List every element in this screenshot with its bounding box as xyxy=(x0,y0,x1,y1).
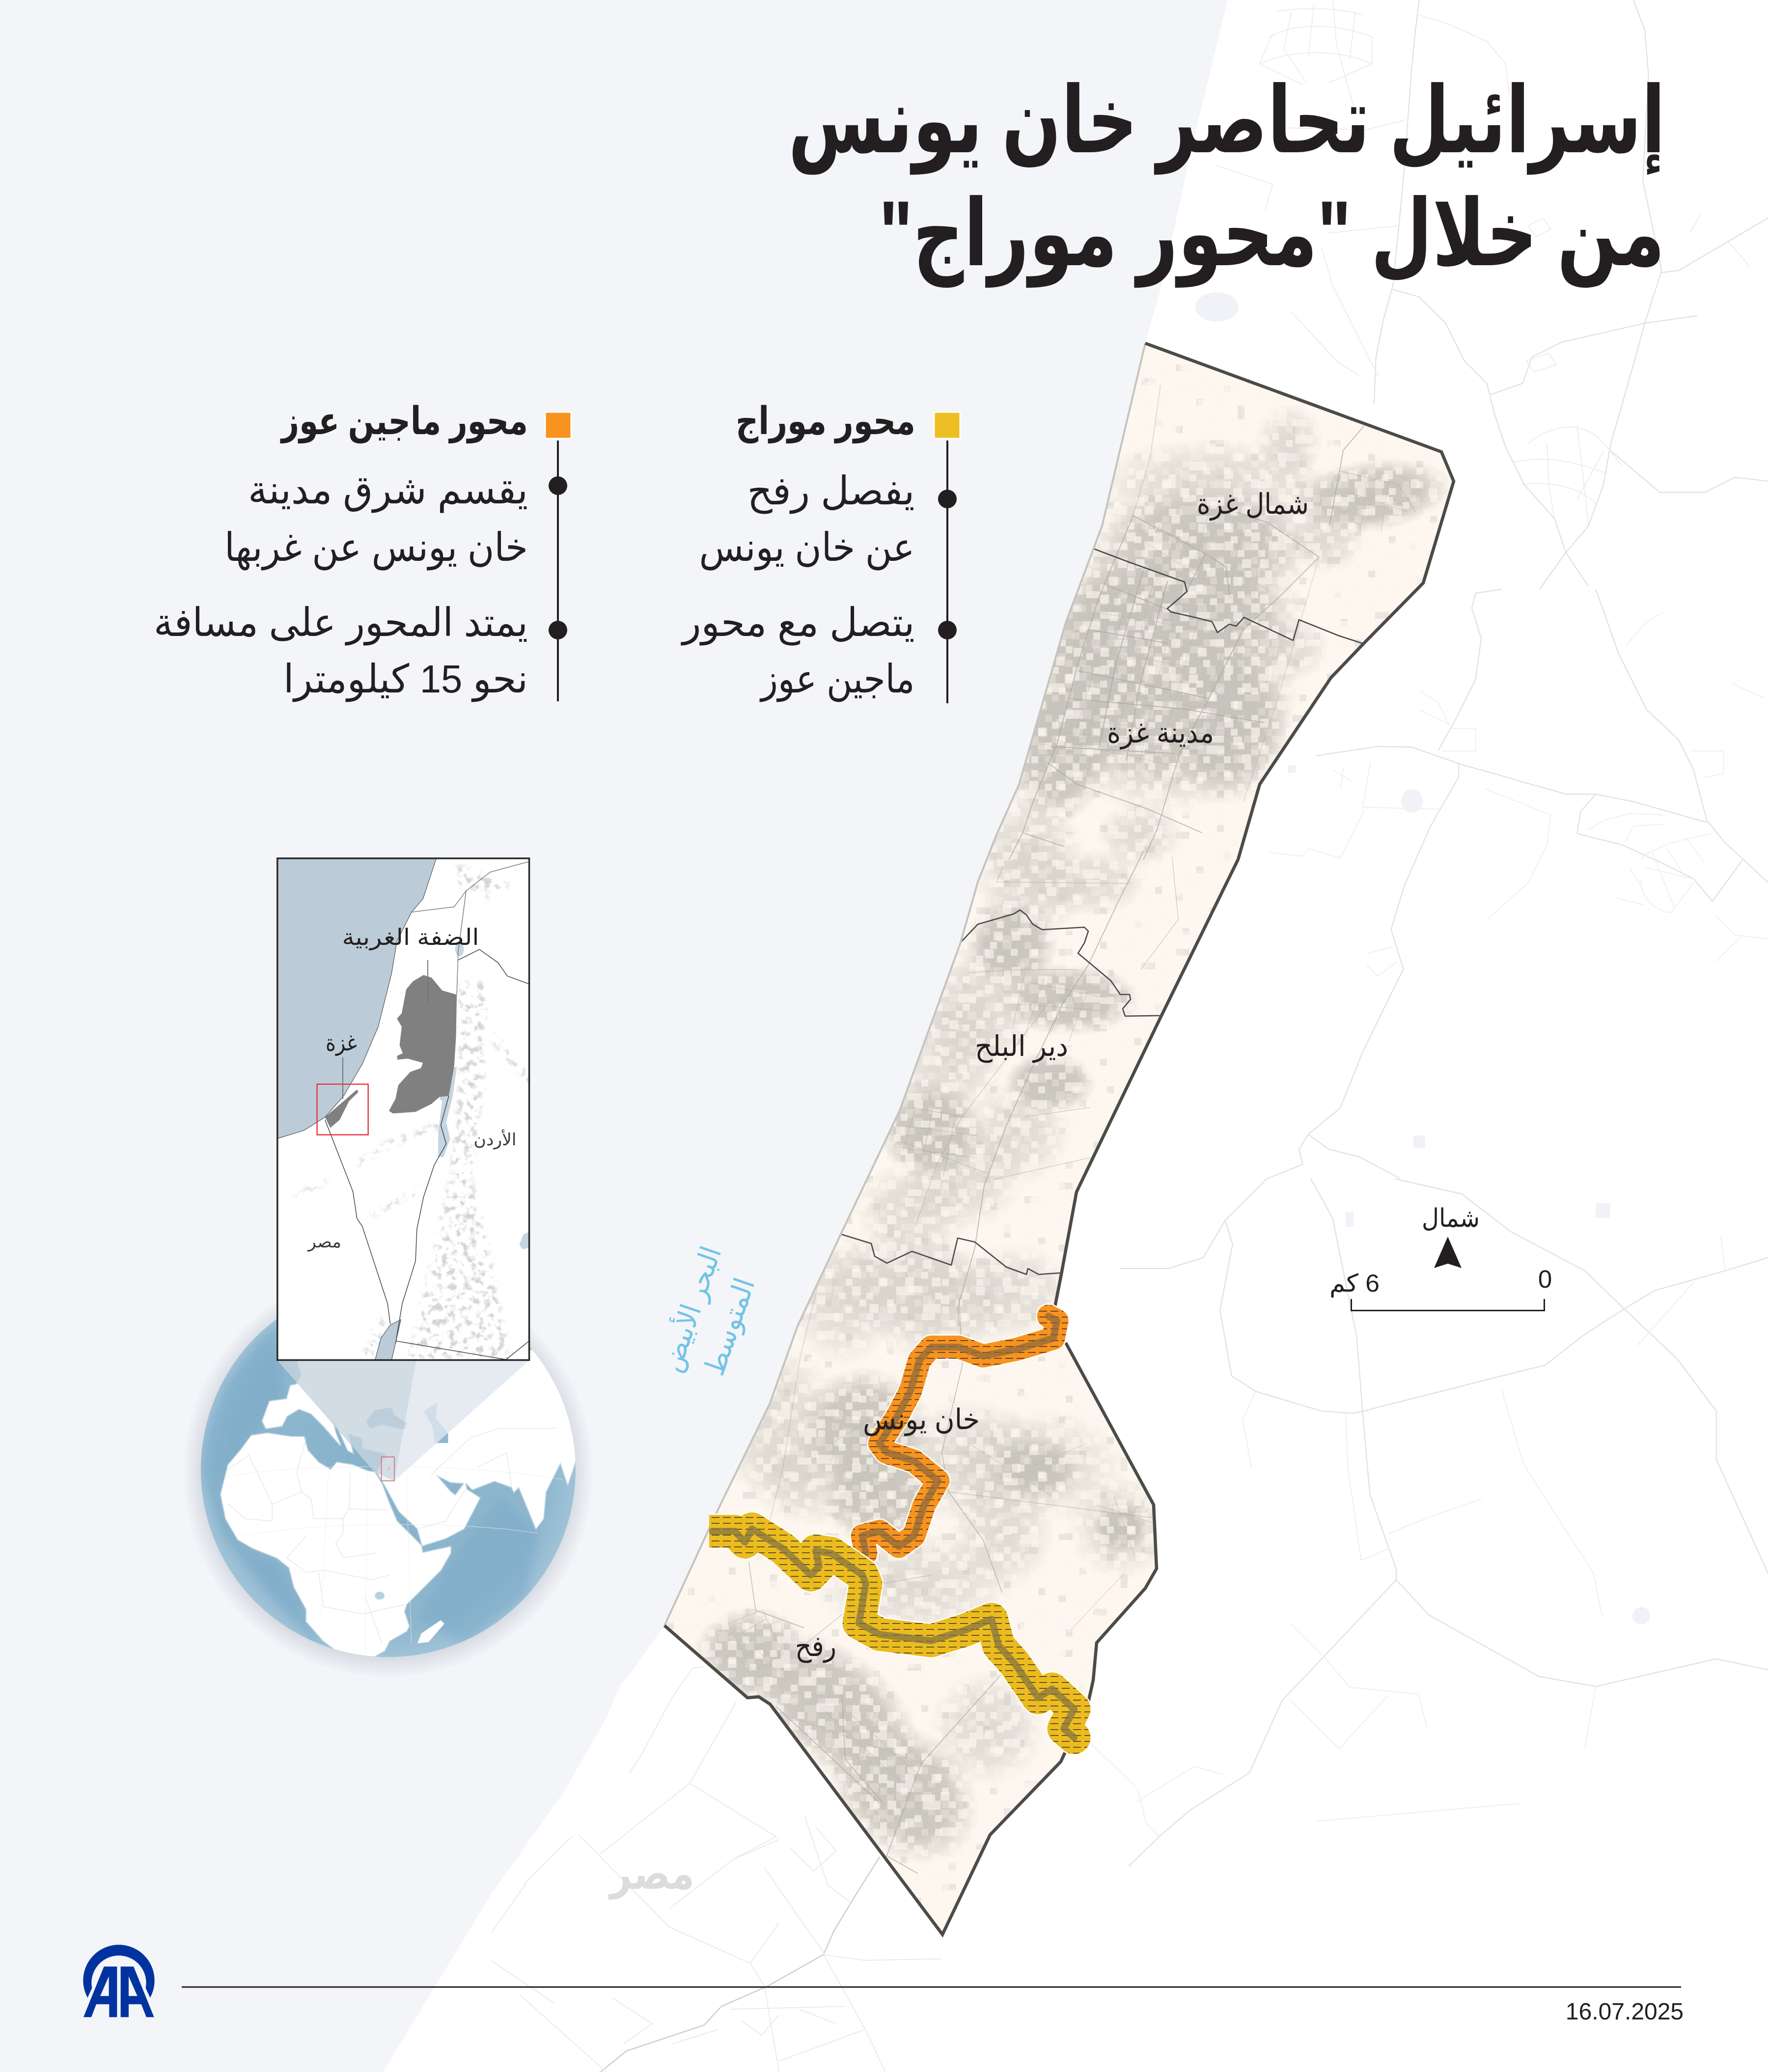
dense built-up blobs xyxy=(692,448,1458,1895)
dead sea xyxy=(438,1067,457,1157)
bullet xyxy=(938,490,957,508)
compass and scale xyxy=(1329,1204,1552,1310)
text: ماجين عوز xyxy=(759,657,914,702)
morag axis (yellow) xyxy=(700,1529,1074,1738)
mediterranean sea xyxy=(277,858,436,1138)
roads egypt side xyxy=(491,1667,942,2072)
scattered blocks xyxy=(638,339,1473,1940)
sea label line one: البحر الأبيض xyxy=(653,1242,728,1376)
label: mediterranean sea xyxy=(653,1242,762,1380)
west bank xyxy=(389,975,457,1113)
gulf of aqaba xyxy=(375,1320,401,1360)
legend panel: magen oz axis xyxy=(154,399,571,702)
heading: محور موراج xyxy=(736,399,915,443)
legend panel: morag axis xyxy=(681,399,960,703)
north arrow xyxy=(1434,1237,1462,1268)
leader line: west bank xyxy=(427,960,428,1004)
governorate borders xyxy=(841,549,1362,1274)
gaza strip map xyxy=(638,339,1473,1940)
gaza xyxy=(325,1089,359,1128)
minor streets south xyxy=(728,1409,1152,1803)
label: deir al-balah: دير البلح xyxy=(975,1030,1068,1063)
scale zero: 0 xyxy=(1538,1265,1552,1293)
ocean xyxy=(201,1282,576,1657)
blocky mottling xyxy=(638,339,1473,1940)
timeline line xyxy=(557,441,559,701)
country borders xyxy=(227,1428,555,1643)
minor streets north xyxy=(1054,478,1409,767)
label: gaza: غزة xyxy=(326,1030,357,1056)
projection cone: right xyxy=(394,1360,530,1481)
label: north gaza: شمال غزة xyxy=(1197,488,1309,521)
north label: شمال xyxy=(1422,1204,1480,1233)
main streets north xyxy=(1009,385,1416,859)
streets south xyxy=(749,1286,1156,1873)
land background xyxy=(383,0,1768,2072)
projection cone: left xyxy=(277,1360,416,1481)
logo: AA xyxy=(83,1945,155,2017)
bullet xyxy=(549,476,567,495)
label: gaza city: مدينة غزة xyxy=(1107,717,1214,750)
gaza spot xyxy=(387,1466,389,1470)
strip land fill xyxy=(664,343,1454,1934)
label: west bank: الضفة الغربية xyxy=(342,924,479,951)
terrain shading xyxy=(297,864,529,1360)
borders xyxy=(325,861,529,1359)
globe shadow xyxy=(183,1267,593,1678)
black sea xyxy=(366,1408,408,1430)
red locator box xyxy=(317,1084,368,1135)
timeline line xyxy=(946,441,948,703)
lake victoria xyxy=(375,1592,385,1600)
swatch: orange xyxy=(545,412,571,439)
city labels xyxy=(795,488,1309,1663)
land: africa xyxy=(221,1433,450,1660)
location box xyxy=(382,1457,394,1481)
locator globe xyxy=(201,1282,587,1660)
sea-side coastline xyxy=(664,343,1145,1626)
roads north east xyxy=(1216,0,1768,589)
magen oz axis (orange) xyxy=(862,1316,1057,1553)
madagascar xyxy=(417,1620,444,1643)
label: jordan: الأردن xyxy=(473,1129,517,1149)
inset land xyxy=(277,858,529,1360)
caspian sea xyxy=(424,1403,448,1443)
built-up areas xyxy=(638,339,1473,1940)
label: khan younis: خان يونس xyxy=(863,1404,980,1437)
text: يمتد المحور على مسافة xyxy=(154,601,528,646)
scale bar xyxy=(1352,1299,1544,1310)
streets central xyxy=(903,851,1178,1326)
graticule xyxy=(226,1466,563,1653)
inset map xyxy=(277,858,529,1360)
bullet xyxy=(549,621,567,639)
land border outline xyxy=(664,343,1454,1934)
label: egypt: مصر xyxy=(307,1233,341,1252)
text: يتصل مع محور xyxy=(681,601,914,646)
swatch: yellow xyxy=(934,412,960,439)
sea label line two: المتوسط xyxy=(698,1274,762,1380)
inset frame xyxy=(277,858,529,1360)
roads south east xyxy=(1091,1179,1768,1866)
streets north and gaza city xyxy=(728,385,1416,1873)
text: عن خان يونس xyxy=(699,525,914,571)
sparse built-up blobs xyxy=(712,403,1365,1788)
ocean shading xyxy=(201,1326,324,1653)
date: 16.07.2025 xyxy=(1566,1999,1684,2025)
roads middle east xyxy=(1267,589,1768,1179)
bullet xyxy=(938,621,957,639)
inland water bodies xyxy=(1195,292,1650,1625)
ocean shading: indian ocean xyxy=(416,1497,538,1643)
label: rafah: رفح xyxy=(795,1630,836,1663)
text: يفصل رفح xyxy=(747,469,914,514)
title xyxy=(788,69,1665,288)
leader line: gaza xyxy=(342,1057,343,1099)
heading: محور ماجين عوز xyxy=(280,399,528,443)
eastern water xyxy=(520,1232,529,1249)
label: egypt on main map: مصر xyxy=(608,1850,694,1900)
blocky mottling xyxy=(638,339,1473,1940)
footer rule xyxy=(182,1986,1681,1988)
lake tiberias xyxy=(455,942,464,956)
text: خان يونس عن غربها xyxy=(224,525,528,571)
inset geography xyxy=(277,858,529,1360)
text: نحو 15 كيلومترا xyxy=(283,657,528,702)
scale six km: 6 كم xyxy=(1329,1270,1380,1298)
land: eurasia xyxy=(262,1350,587,1546)
text: يقسم شرق مدينة xyxy=(248,468,528,513)
